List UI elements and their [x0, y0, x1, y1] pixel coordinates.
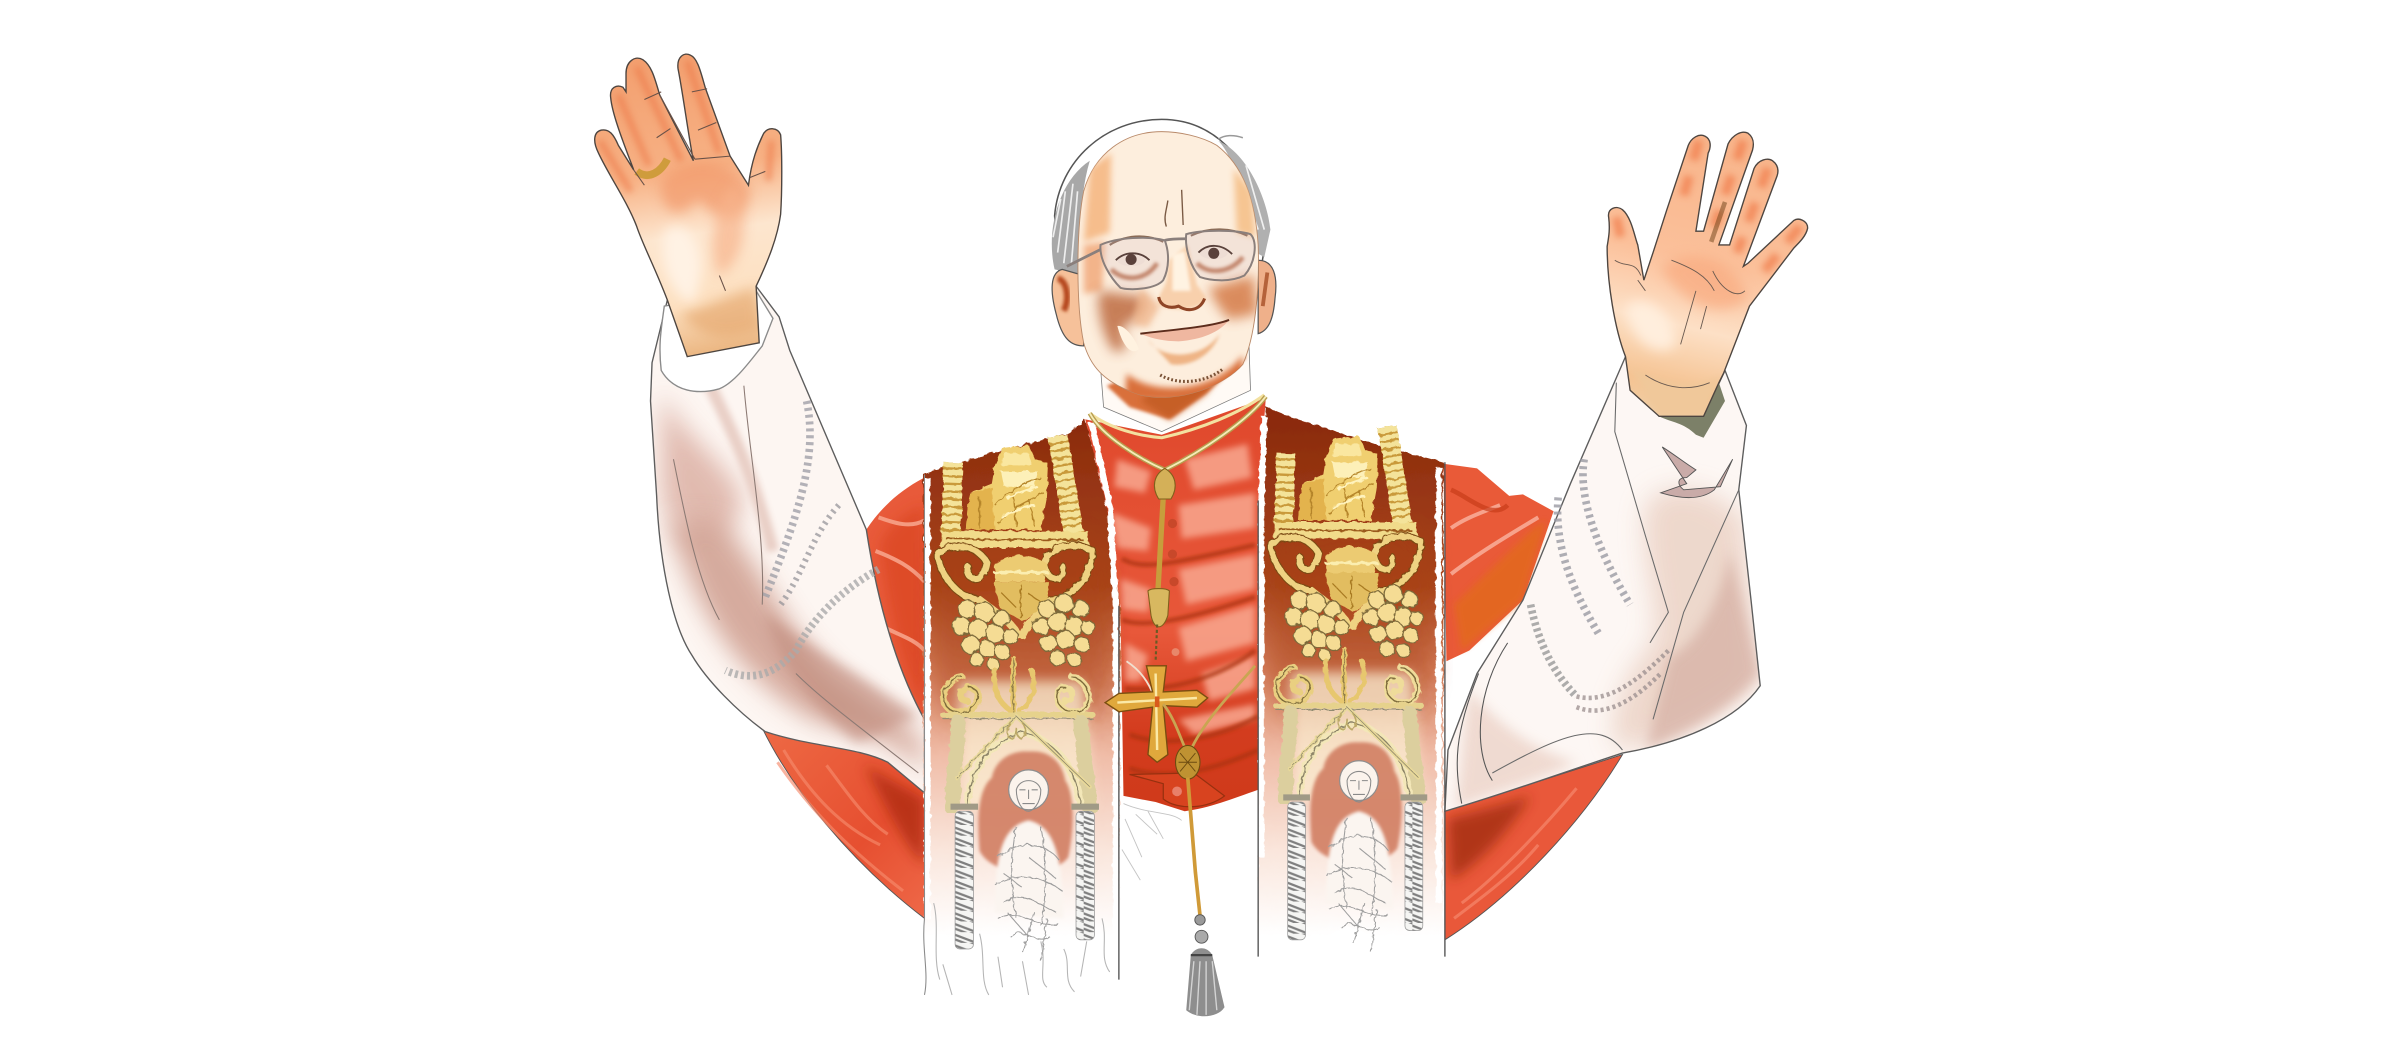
right red upper sleeve: [1443, 464, 1554, 661]
left sleeve: [651, 286, 926, 793]
right stole: [1258, 407, 1445, 957]
left cape: [756, 715, 924, 918]
nose: [1158, 245, 1206, 310]
glasses: [1067, 231, 1255, 289]
illustration: waving pope portrait: [594, 54, 1808, 1016]
ears: [1052, 260, 1276, 346]
face: [1078, 132, 1258, 401]
tassel cord: [1163, 666, 1255, 1016]
skull cap and hair: [1052, 119, 1270, 276]
pectoral cord and cross: [1105, 468, 1208, 762]
right sleeve: [1445, 357, 1760, 811]
left stole: [923, 419, 1120, 995]
eyes: [1111, 246, 1243, 278]
white alb below cassock: [1120, 793, 1258, 980]
wedding ring: [637, 159, 667, 175]
red cassock: [1085, 398, 1266, 811]
left red upper sleeve: [866, 476, 928, 742]
mouth: [1140, 320, 1229, 341]
cross: [1105, 666, 1208, 762]
right cape: [1445, 755, 1622, 940]
left hand: [595, 54, 782, 357]
head: [1052, 119, 1276, 401]
neck and collar: [1090, 340, 1264, 438]
right hand: [1607, 132, 1808, 416]
collar cord: [1090, 396, 1266, 470]
